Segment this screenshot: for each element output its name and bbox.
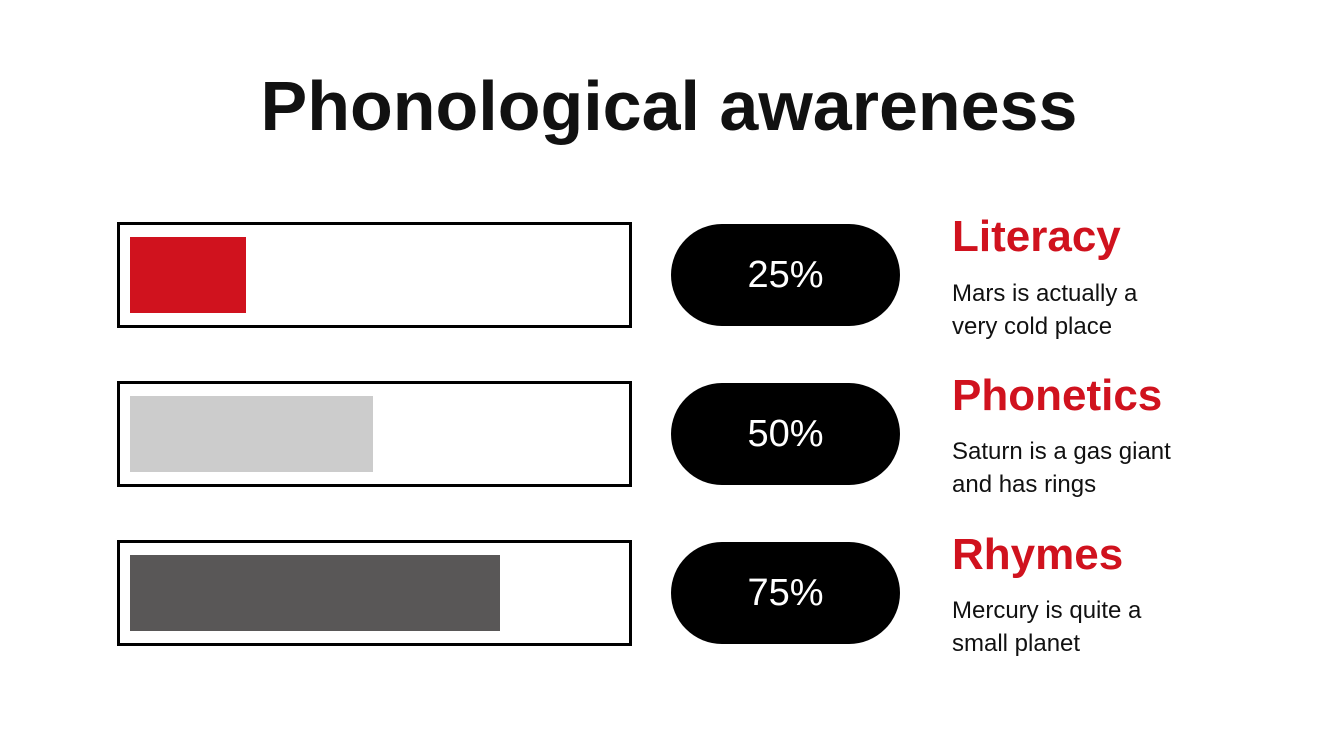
text: rhymes xyxy=(952,597,1142,657)
pill: 50% xyxy=(671,383,900,485)
text: literacy: Mars is actually a xyxy=(952,280,1137,307)
text: phonetics: Saturn is a gas giant xyxy=(952,438,1171,465)
pill: 50%: 50% xyxy=(747,412,824,454)
text: literacy: very cold place xyxy=(952,313,1112,340)
heading: Literacy: Literacy xyxy=(952,212,1121,261)
bar: phonetics xyxy=(117,381,632,487)
bar: literacy xyxy=(117,222,632,328)
pill: 25%: 25% xyxy=(747,254,824,296)
heading: Rhymes: Rhymes xyxy=(952,530,1123,579)
text: phonetics: and has rings xyxy=(952,471,1096,498)
text: rhymes: Mercury is quite a xyxy=(952,597,1141,624)
text: phonetics xyxy=(952,438,1171,498)
text: literacy xyxy=(952,280,1138,340)
title: Phonological awareness xyxy=(261,67,1077,145)
pill: 75%: 75% xyxy=(747,572,824,614)
heading: Phonetics: Phonetics xyxy=(952,371,1162,420)
text: rhymes: small planet xyxy=(952,630,1080,657)
pill: 25% xyxy=(671,224,900,326)
pill: 75% xyxy=(671,542,900,644)
bar: rhymes xyxy=(117,540,632,646)
